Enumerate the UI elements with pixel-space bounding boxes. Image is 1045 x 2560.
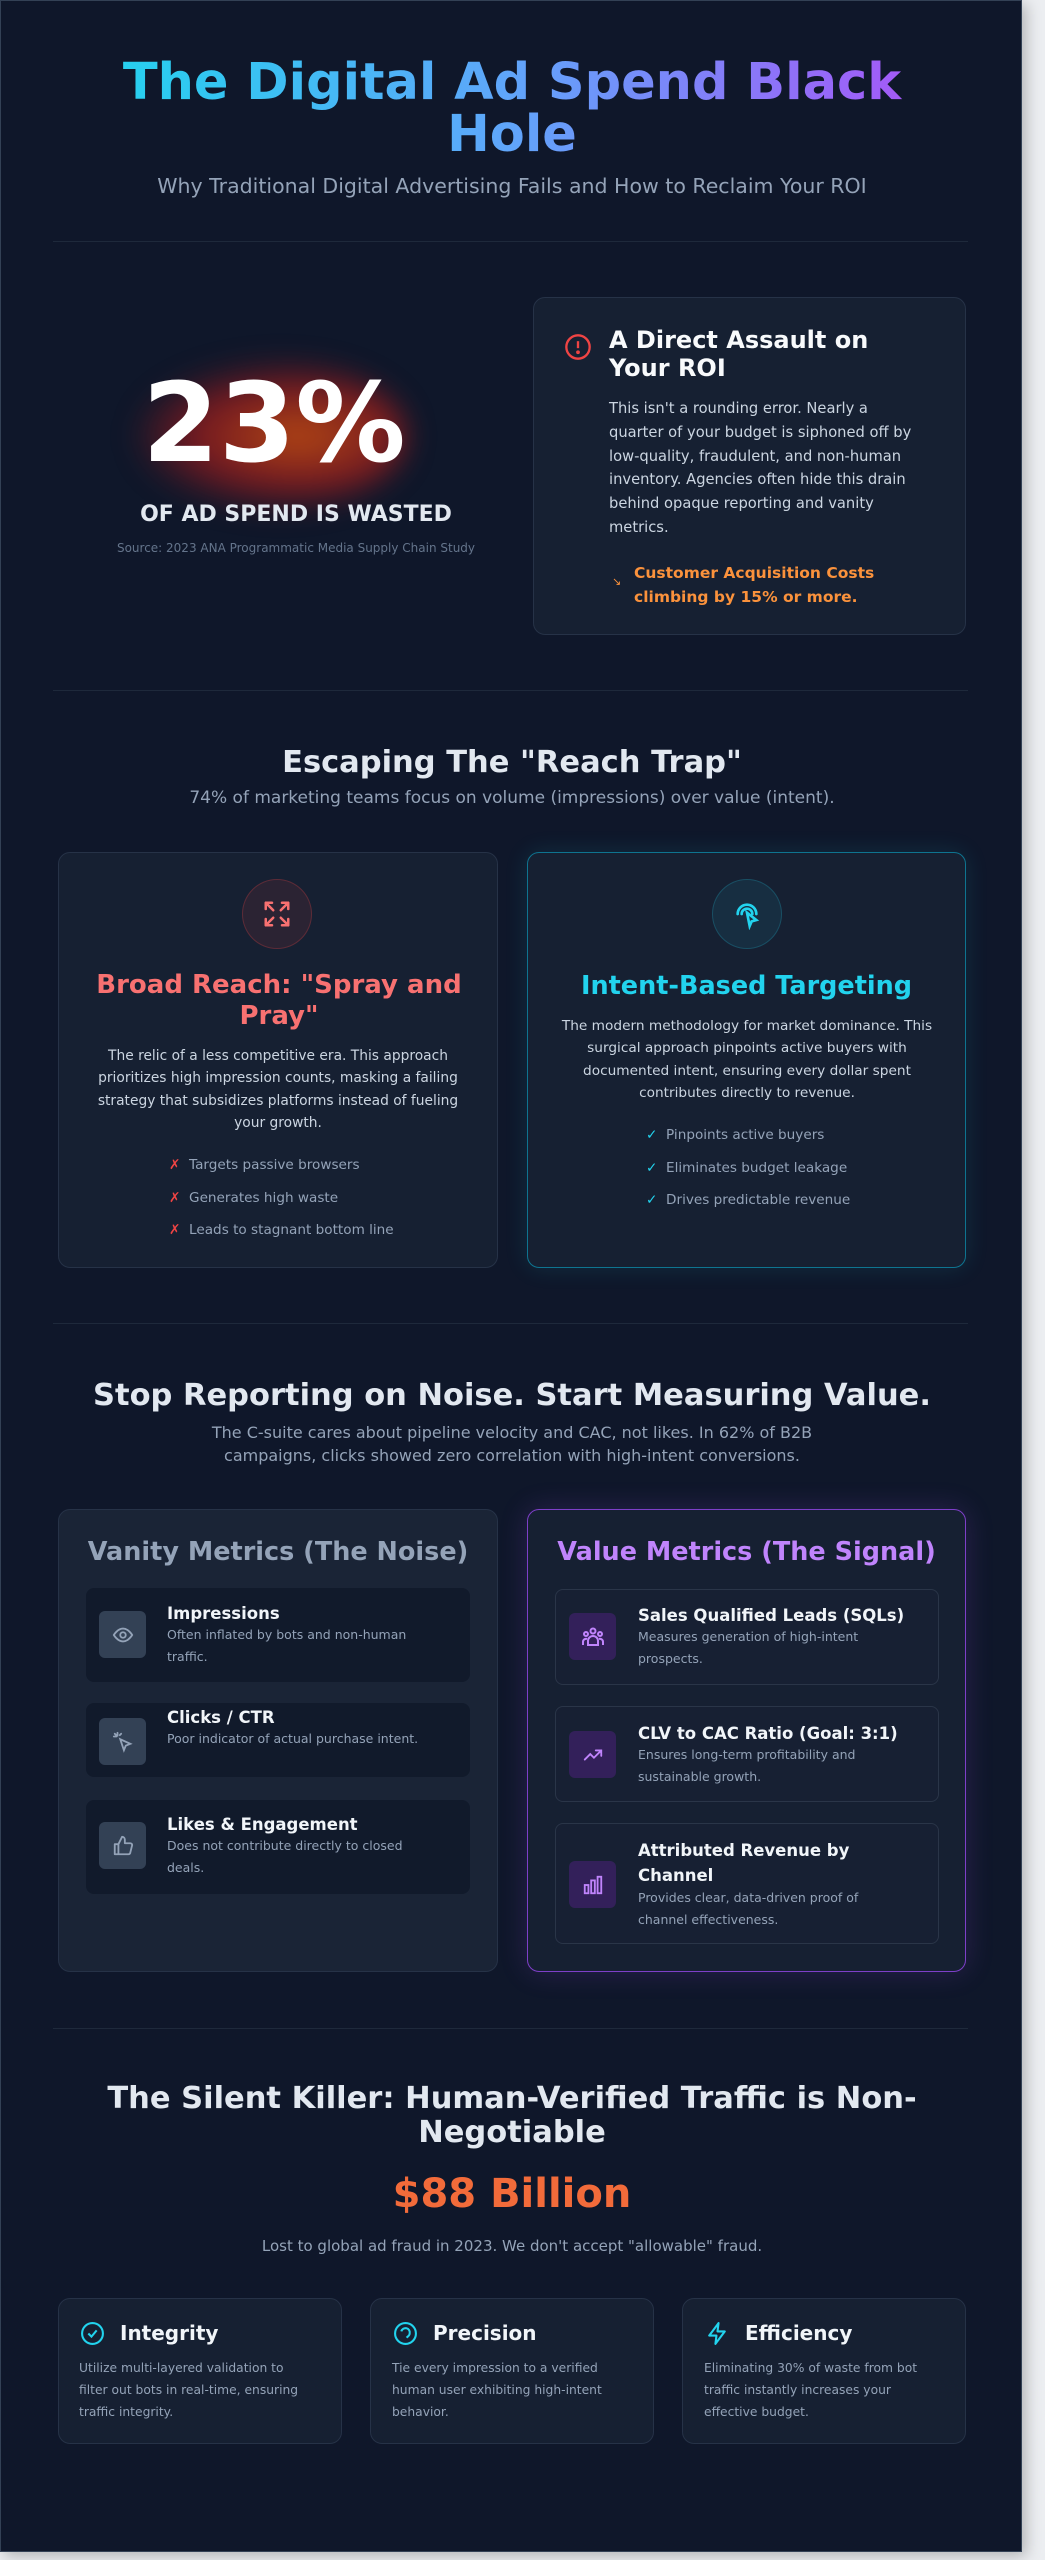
item: likes xyxy=(86,1800,470,1894)
hero stat: 23% xyxy=(117,352,475,555)
item: impressions: Impressions xyxy=(167,1604,280,1623)
list: pros xyxy=(646,1127,850,1208)
big number: 23% xyxy=(142,359,406,487)
icon: target pointer xyxy=(712,879,782,949)
panel: integrity: Integrity xyxy=(120,2321,218,2345)
icon: bar chart xyxy=(569,1861,616,1908)
panel: efficiency xyxy=(682,2298,966,2444)
panel: broad reach xyxy=(58,852,498,1268)
item: CLV to CAC: Ensures long-term profitability and sustainable growth. xyxy=(638,1747,855,1784)
glow xyxy=(136,361,406,511)
panel: precision: Precision xyxy=(433,2321,537,2345)
icon: check circle xyxy=(81,2322,104,2345)
heading: silent killer: The Silent Killer: Human-Verified Traffic is Non-Negotiable xyxy=(107,2081,917,2150)
panel: precision: Tie every impression to a verified human user exhibiting high-intent behavior. xyxy=(392,2361,602,2419)
icon: lightning xyxy=(708,2322,726,2345)
icon: eye xyxy=(99,1611,146,1658)
body: The relic of a less competitive era. This approach prioritizes high impression counts, masking a failing strategy that subsidizes platforms instead of fueling your growth. xyxy=(98,1048,458,1131)
icon: fingerprint circle xyxy=(394,2322,417,2345)
panel: efficiency: Eliminating 30% of waste from bot traffic instantly increases your effective budget. xyxy=(704,2361,917,2419)
icon: pointer xyxy=(99,1718,146,1765)
body: The modern methodology for market dominance. This surgical approach pinpoints active buyers with documented intent, ensuring every dollar spent contributes directly to revenue. xyxy=(562,1018,932,1101)
heading: Broad Reach: "Spray and Pray" xyxy=(96,970,462,1031)
item: likes: Likes & Engagement xyxy=(167,1815,358,1834)
panel: integrity: Utilize multi-layered validation to filter out bots in real-time, ensuring traffic integrity. xyxy=(79,2361,298,2419)
stat caption: Lost to global ad fraud in 2023. We don't accept "allowable" fraud. xyxy=(262,2237,762,2255)
list: pros: ✓ Drives predictable revenue xyxy=(646,1192,850,1208)
item: likes: Does not contribute directly to closed deals. xyxy=(167,1838,403,1875)
panel: efficiency: Efficiency xyxy=(745,2321,852,2345)
body text: This isn't a rounding error. Nearly a quarter of your budget is siphoned off by low-quality, fraudulent, and non-human inventory. Agencies often hide this drain behind opaque reporting and vanity metrics. xyxy=(609,400,911,536)
item: clicks xyxy=(86,1703,470,1777)
list: cons: ✗ Targets passive browsers xyxy=(169,1157,360,1173)
list: cons: ✗ Generates high waste xyxy=(169,1190,338,1206)
list: cons xyxy=(169,1157,394,1238)
item: attributed revenue: Provides clear, data-driven proof of channel effectiveness. xyxy=(638,1890,858,1927)
item: impressions: Often inflated by bots and non-human traffic. xyxy=(167,1627,406,1664)
item: attributed revenue: Attributed Revenue by Channel xyxy=(638,1841,849,1885)
icon: thumbs up xyxy=(99,1822,146,1869)
icon: users xyxy=(569,1613,616,1660)
subheading: 74% of marketing teams focus on volume (impressions) over value (intent). xyxy=(189,788,835,808)
source: Source: 2023 ANA Programmatic Media Supply Chain Study xyxy=(117,541,475,555)
panel: value metrics xyxy=(527,1509,966,1972)
icon: trend up xyxy=(569,1731,616,1778)
panel title: Value Metrics (The Signal) xyxy=(557,1537,936,1567)
stat: $88 billion: $88 Billion xyxy=(393,2171,631,2217)
item: SQLs: Sales Qualified Leads (SQLs) xyxy=(638,1606,904,1625)
heading: reach trap: Escaping The "Reach Trap" xyxy=(282,745,742,780)
item: clicks: Poor indicator of actual purchase intent. xyxy=(167,1731,418,1746)
panel: integrity xyxy=(58,2298,342,2444)
icon: expand xyxy=(242,879,312,949)
heading: Intent-Based Targeting xyxy=(581,971,912,1001)
item: SQLs xyxy=(555,1589,939,1685)
item: attributed revenue xyxy=(555,1823,939,1944)
stat label: OF AD SPEND IS WASTED xyxy=(140,502,452,527)
callout: CAC: Customer Acquisition Costs climbing by 15% or more. xyxy=(634,564,874,606)
list: pros: ✓ Eliminates budget leakage xyxy=(646,1160,847,1176)
list: cons: ✗ Leads to stagnant bottom line xyxy=(169,1222,394,1238)
title: The Digital Ad Spend Black Hole xyxy=(123,53,901,164)
panel: vanity metrics xyxy=(58,1509,498,1972)
panel title: Vanity Metrics (The Noise) xyxy=(88,1537,468,1567)
item: SQLs: Measures generation of high-intent prospects. xyxy=(638,1629,858,1666)
callout: CAC: ↘ xyxy=(612,575,621,588)
item: impressions xyxy=(86,1588,470,1682)
panel: intent-based xyxy=(527,852,966,1268)
heading: noise vs value: Stop Reporting on Noise. Start Measuring Value. xyxy=(93,1378,931,1413)
item: CLV to CAC xyxy=(555,1706,939,1802)
list: pros: ✓ Pinpoints active buyers xyxy=(646,1127,824,1143)
subheading: The C-suite cares about pipeline velocity and CAC, not likes. In 62% of B2B campaigns, clicks showed zero correlation with high-intent conversions. xyxy=(212,1423,812,1465)
item: CLV to CAC: CLV to CAC Ratio (Goal: 3:1) xyxy=(638,1724,898,1743)
icon: alert xyxy=(565,334,591,360)
panel: direct assault xyxy=(533,297,966,635)
heading: A Direct Assault on Your ROI xyxy=(609,326,868,382)
subtitle: Why Traditional Digital Advertising Fails and How to Reclaim Your ROI xyxy=(157,174,867,198)
item: clicks: Clicks / CTR xyxy=(167,1708,275,1727)
panel: precision xyxy=(370,2298,654,2444)
